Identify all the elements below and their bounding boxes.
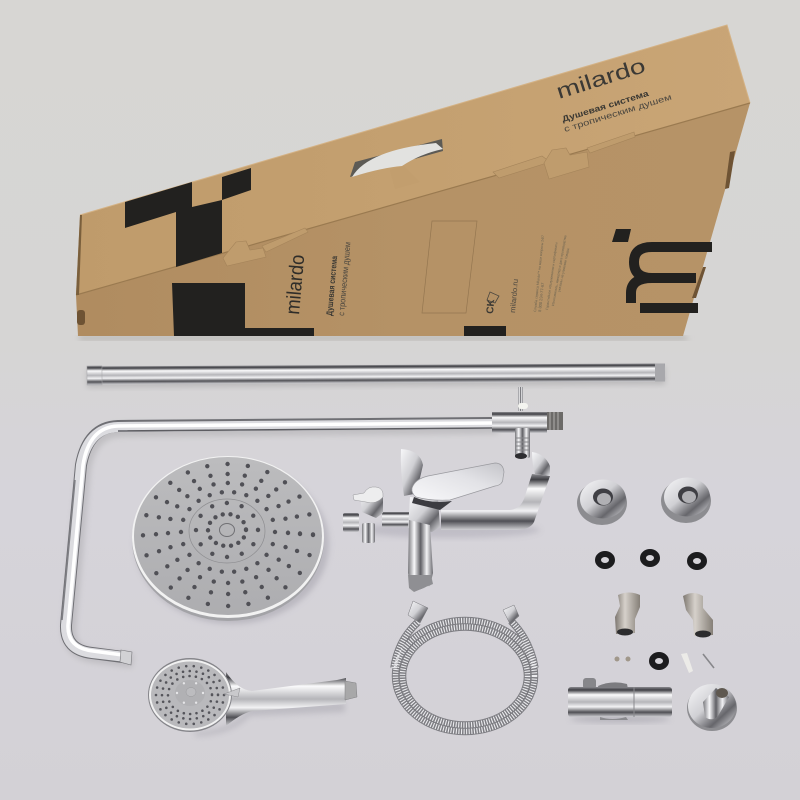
cardboard box — [76, 25, 750, 340]
brand on lower panel: milardo — [282, 254, 309, 315]
wall flange right — [661, 478, 711, 523]
long straight rod — [87, 363, 665, 388]
left connector — [408, 601, 428, 623]
white knob — [518, 403, 528, 409]
wall plug — [681, 653, 693, 673]
nozzle rings — [143, 464, 313, 606]
black pattern on upper panel — [125, 168, 251, 267]
centre button — [220, 524, 234, 536]
right eccentric adapter — [683, 593, 713, 638]
product name lower panel: Душевая система — [324, 255, 339, 316]
big m logo — [612, 229, 712, 308]
nozzle rings — [156, 666, 224, 724]
hose body — [394, 620, 535, 732]
switch — [224, 688, 240, 697]
grey button — [583, 678, 596, 689]
label frame — [422, 221, 477, 313]
handle tip — [345, 681, 357, 700]
lower clip — [600, 717, 628, 720]
diverter knob — [353, 487, 383, 503]
spout pipe — [441, 474, 550, 530]
flaps and tabs — [223, 132, 635, 266]
head — [148, 658, 232, 732]
product subtitle lower panel: с тропическим душем — [336, 241, 352, 316]
lower threaded outlet — [515, 428, 530, 458]
right connector — [503, 605, 519, 624]
box upper panel — [76, 25, 750, 295]
centre disc — [175, 680, 205, 706]
cap — [532, 452, 550, 476]
rubber gaskets — [598, 552, 704, 667]
product subtitle upper panel: с тропическим душем — [563, 92, 673, 134]
left pipe — [382, 512, 412, 527]
hose ridges — [394, 620, 535, 732]
diverter body — [360, 489, 383, 518]
rod slider — [568, 678, 672, 723]
small print: 8 800 234-77-67 — [537, 282, 545, 312]
hand shower — [148, 658, 357, 736]
handle — [226, 672, 346, 726]
wall plate — [401, 449, 423, 496]
centre nozzles — [177, 682, 203, 704]
curved shower arm — [62, 423, 498, 665]
slots in box side — [77, 151, 735, 325]
box top edge highlight — [80, 25, 750, 215]
body — [568, 687, 672, 717]
handle hole with shower head visible — [350, 139, 443, 189]
flexible hose — [394, 601, 535, 732]
bath mixer — [343, 449, 550, 592]
left nut — [343, 513, 359, 532]
website: milardo.ru — [508, 279, 520, 313]
small print: Служба сервиса Milardo™ на ваши вопросы 24/7 — [533, 235, 545, 312]
top pin — [518, 387, 523, 411]
box shadow — [78, 336, 690, 340]
wall flange left — [577, 480, 627, 525]
small screws — [614, 656, 630, 662]
screw — [703, 654, 714, 668]
small print — [533, 235, 570, 312]
box end slot left — [76, 215, 82, 295]
small print: указаны на упаковке товара — [557, 248, 570, 292]
small print: Изготовитель, импортёр и дата производства — [551, 235, 567, 306]
wall mount outlet — [687, 684, 737, 731]
box fold line — [76, 103, 750, 295]
left eccentric adapter — [615, 592, 640, 636]
spout tip — [408, 575, 433, 592]
product name upper panel: Душевая система — [561, 88, 650, 124]
bottom nut — [362, 523, 375, 543]
box lower panel — [76, 103, 750, 336]
seam — [633, 687, 635, 717]
brand on upper panel: milardo — [554, 54, 648, 104]
small print: Гарантийное обслуживание и сертификаты — [545, 241, 559, 310]
central body — [408, 497, 440, 532]
rain shower head — [132, 456, 329, 624]
clip — [598, 682, 629, 694]
spout down — [408, 520, 433, 592]
recycling icon — [487, 292, 499, 303]
lever shadow — [412, 497, 452, 510]
thread — [547, 412, 563, 430]
black pattern on lower panel — [172, 283, 506, 336]
lever handle — [412, 463, 504, 500]
arm diverter fitting — [492, 387, 563, 459]
inner circle — [189, 499, 265, 563]
certification mark: CK — [485, 298, 497, 314]
